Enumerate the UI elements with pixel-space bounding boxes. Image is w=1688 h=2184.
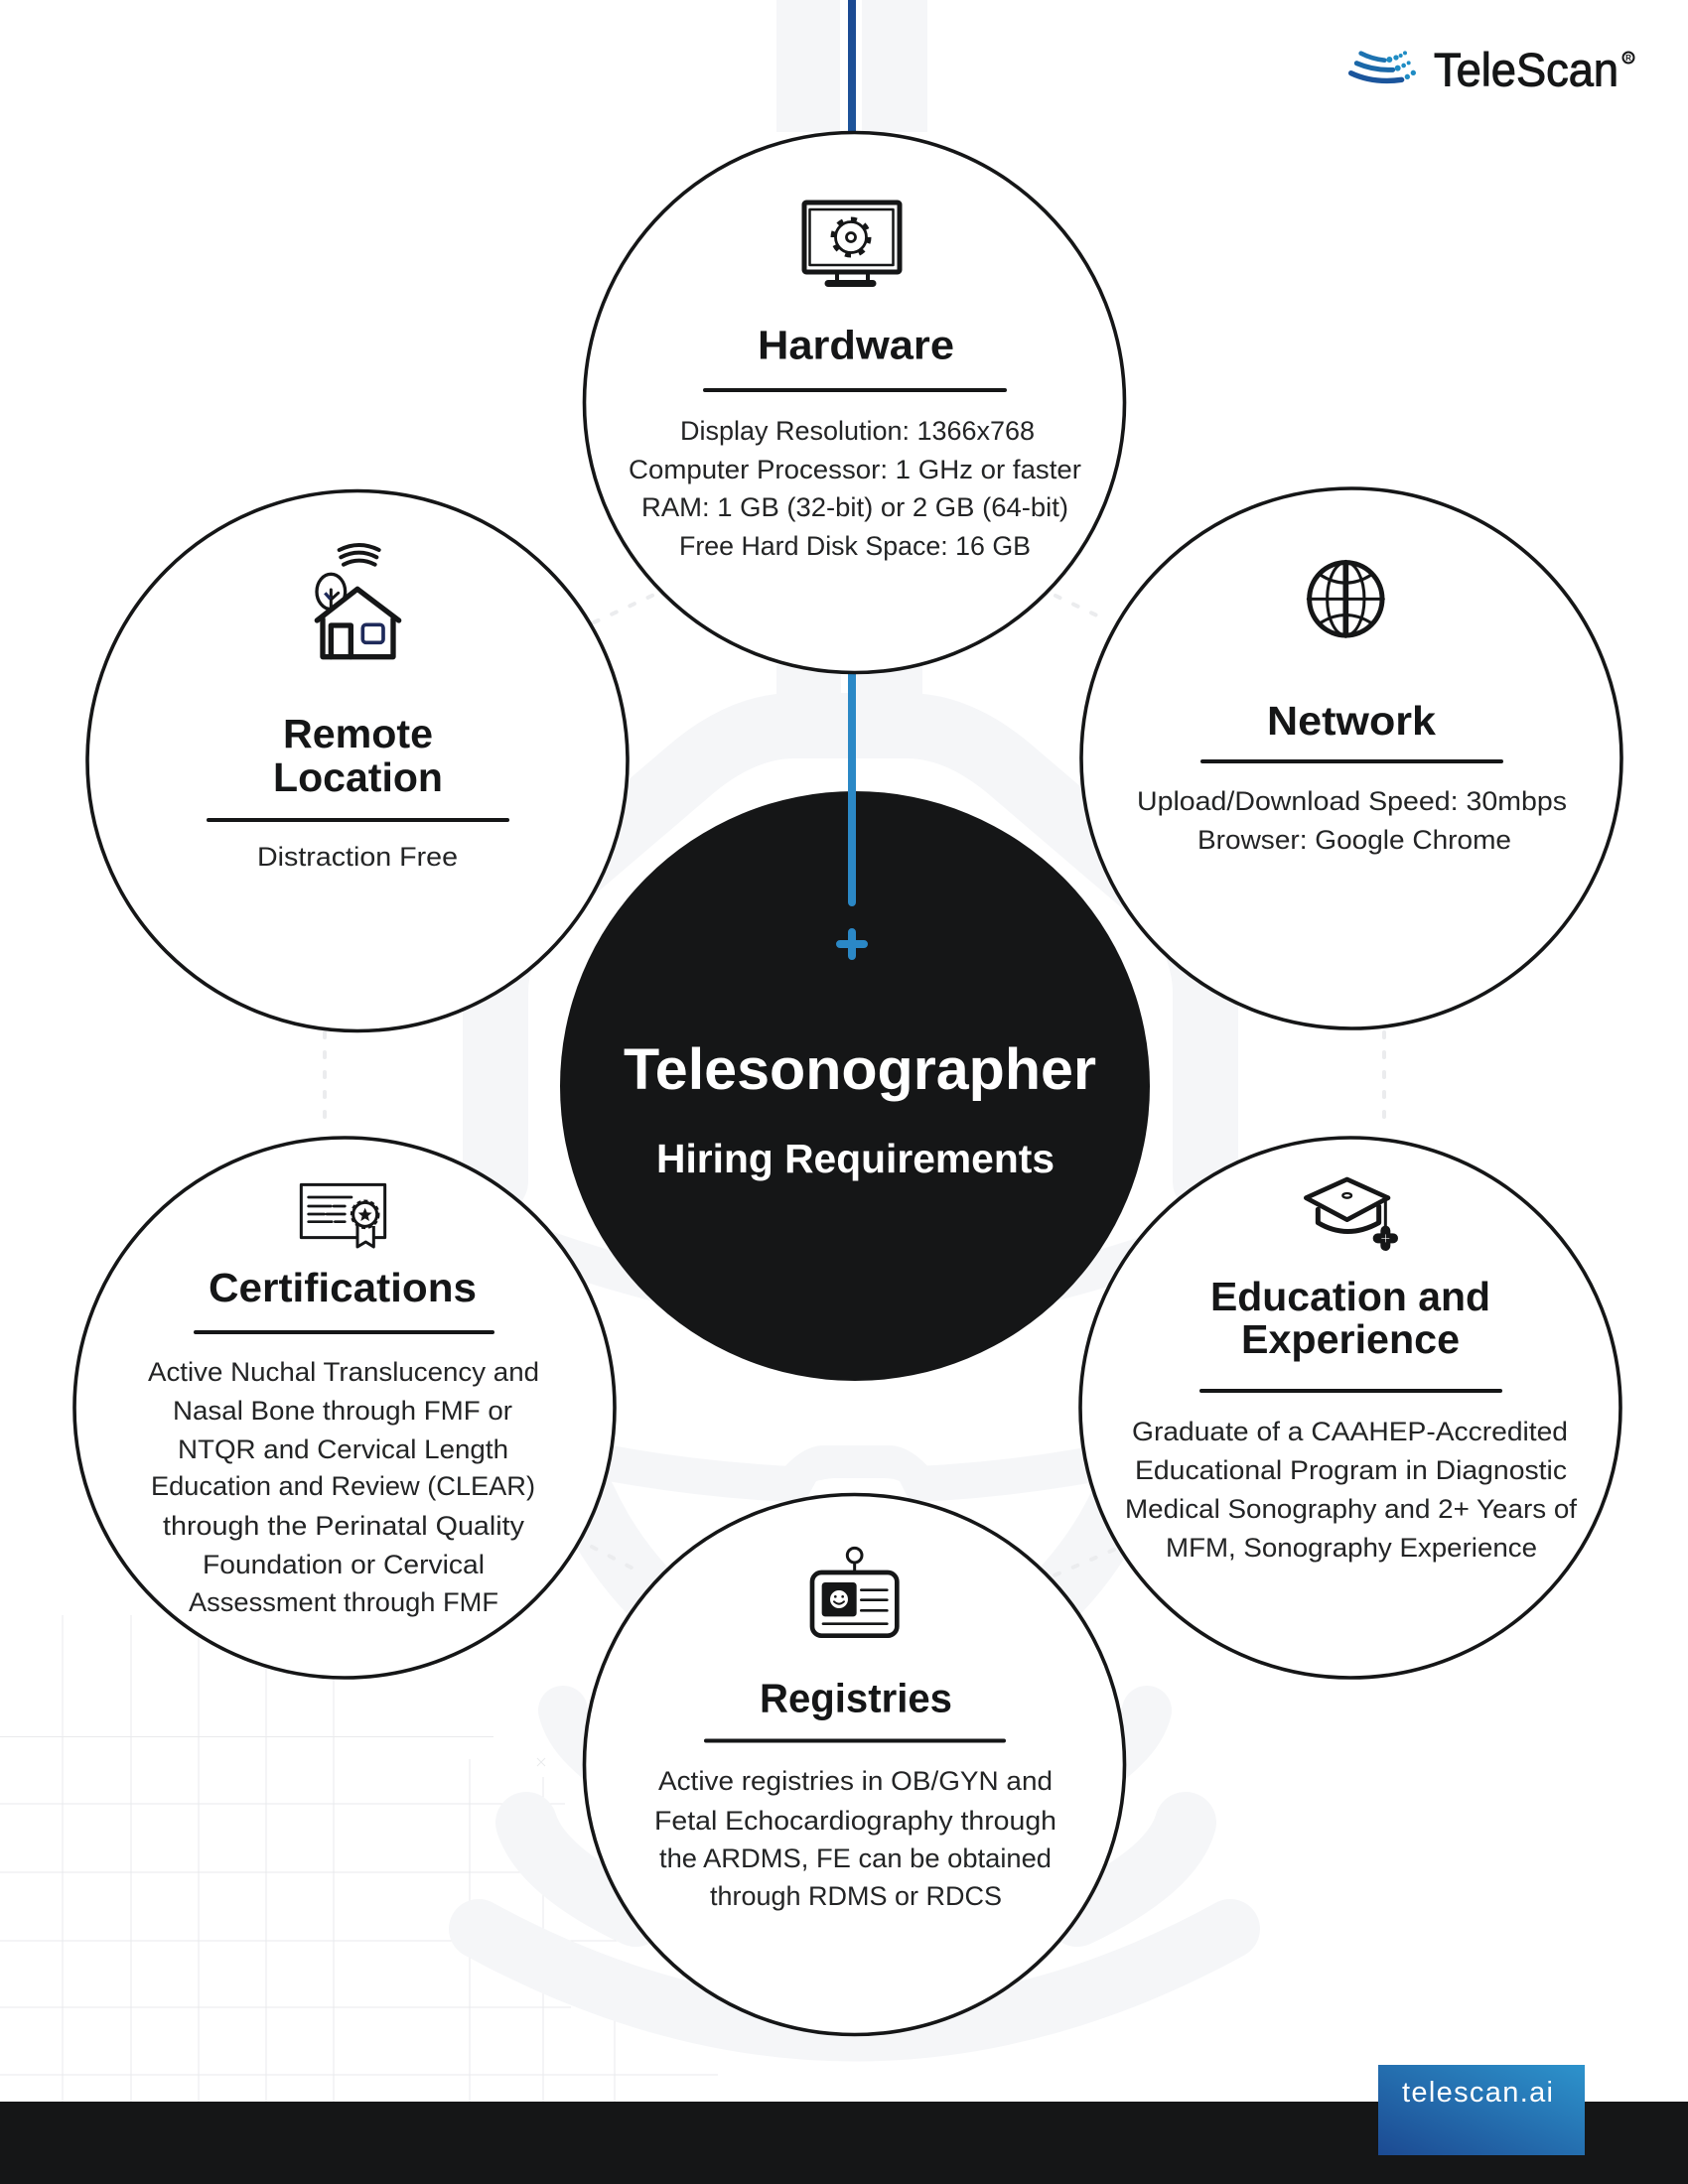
heading: Experience: [1241, 1316, 1460, 1362]
icon: monitor with gear: [804, 203, 900, 284]
body text: Assessment through FMF: [189, 1587, 498, 1617]
logo: TeleScan: [1351, 44, 1634, 95]
icon: graduation cap: [1306, 1179, 1393, 1246]
body text: through the Perinatal Quality: [163, 1511, 525, 1541]
body text: Active Nuchal Translucency and: [148, 1357, 539, 1387]
heading: Education and: [1210, 1274, 1490, 1319]
divider: [209, 818, 507, 822]
divider: [705, 388, 1005, 392]
body text: Nasal Bone through FMF or: [173, 1396, 512, 1426]
body text: Education and Review (CLEAR): [151, 1471, 535, 1501]
heading: [273, 711, 443, 800]
divider: [1201, 1389, 1500, 1393]
body text: [1125, 1417, 1578, 1563]
body text: [629, 416, 1081, 561]
body text: Fetal Echocardiography through: [654, 1806, 1056, 1836]
heading: Registries: [760, 1676, 952, 1721]
body text: Distraction Free: [257, 842, 458, 872]
heading: Network: [1267, 698, 1436, 744]
panel: remote location: [87, 490, 628, 1030]
body text: Computer Processor: 1 GHz or faster: [629, 455, 1081, 484]
panel: hardware: [584, 133, 1124, 673]
divider: [196, 1330, 492, 1334]
body text: MFM, Sonography Experience: [1166, 1533, 1537, 1563]
website badge: [1378, 2065, 1585, 2155]
icon: globe: [1308, 563, 1383, 635]
registered mark: R: [1625, 54, 1631, 63]
panel: education and experience: [1080, 1138, 1620, 1678]
heading: Location: [273, 754, 443, 800]
background grid: [0, 1615, 718, 2102]
body text: Medical Sonography and 2+ Years of: [1125, 1494, 1578, 1524]
body text: Graduate of a CAAHEP-Accredited: [1132, 1417, 1568, 1446]
icon: house with wifi and tree: [317, 545, 399, 657]
heading: [1210, 1274, 1490, 1362]
panel: certifications: [74, 1138, 615, 1678]
blue connector line top: [848, 0, 856, 135]
body text: Free Hard Disk Space: 16 GB: [679, 531, 1031, 561]
body text: Foundation or Cervical: [203, 1550, 485, 1579]
divider: [1202, 759, 1501, 763]
logo wordmark: TeleScan: [1434, 44, 1618, 95]
body text: Educational Program in Diagnostic: [1135, 1455, 1567, 1485]
body text: through RDMS or RDCS: [710, 1881, 1002, 1911]
body text: [1137, 786, 1567, 855]
registered mark: [1622, 52, 1634, 64]
title: Telesonographer: [624, 1037, 1096, 1102]
subtitle: Hiring Requirements: [656, 1136, 1055, 1181]
panel: network: [1081, 488, 1621, 1028]
icon: id badge: [812, 1548, 897, 1636]
body text: Browser: Google Chrome: [1197, 825, 1511, 855]
blue connector line lower: [848, 671, 856, 902]
panel: registries: [584, 1495, 1124, 2035]
heading: Certifications: [209, 1265, 477, 1310]
divider: [706, 1739, 1004, 1743]
website badge: telescan.ai: [1402, 2077, 1553, 2109]
body text: the ARDMS, FE can be obtained: [659, 1843, 1052, 1873]
heading: Hardware: [758, 322, 954, 367]
icon: plus: [840, 932, 864, 956]
body text: Display Resolution: 1366x768: [680, 416, 1035, 446]
body text: RAM: 1 GB (32-bit) or 2 GB (64-bit): [641, 492, 1068, 522]
body text: Active registries in OB/GYN and: [658, 1766, 1053, 1796]
dotted connectors: [325, 594, 1384, 1577]
icon: scan waves: [1351, 51, 1416, 80]
body text: [654, 1766, 1056, 1911]
footer bar: [0, 2102, 1688, 2184]
panel: center title: [560, 671, 1150, 1381]
body text: NTQR and Cervical Length: [178, 1434, 508, 1464]
heading: Remote: [283, 711, 433, 756]
icon: certificate: [301, 1184, 385, 1247]
background stethoscope watermark: [479, 0, 1230, 2031]
body text: Upload/Download Speed: 30mbps: [1137, 786, 1567, 816]
body text: [148, 1357, 539, 1617]
